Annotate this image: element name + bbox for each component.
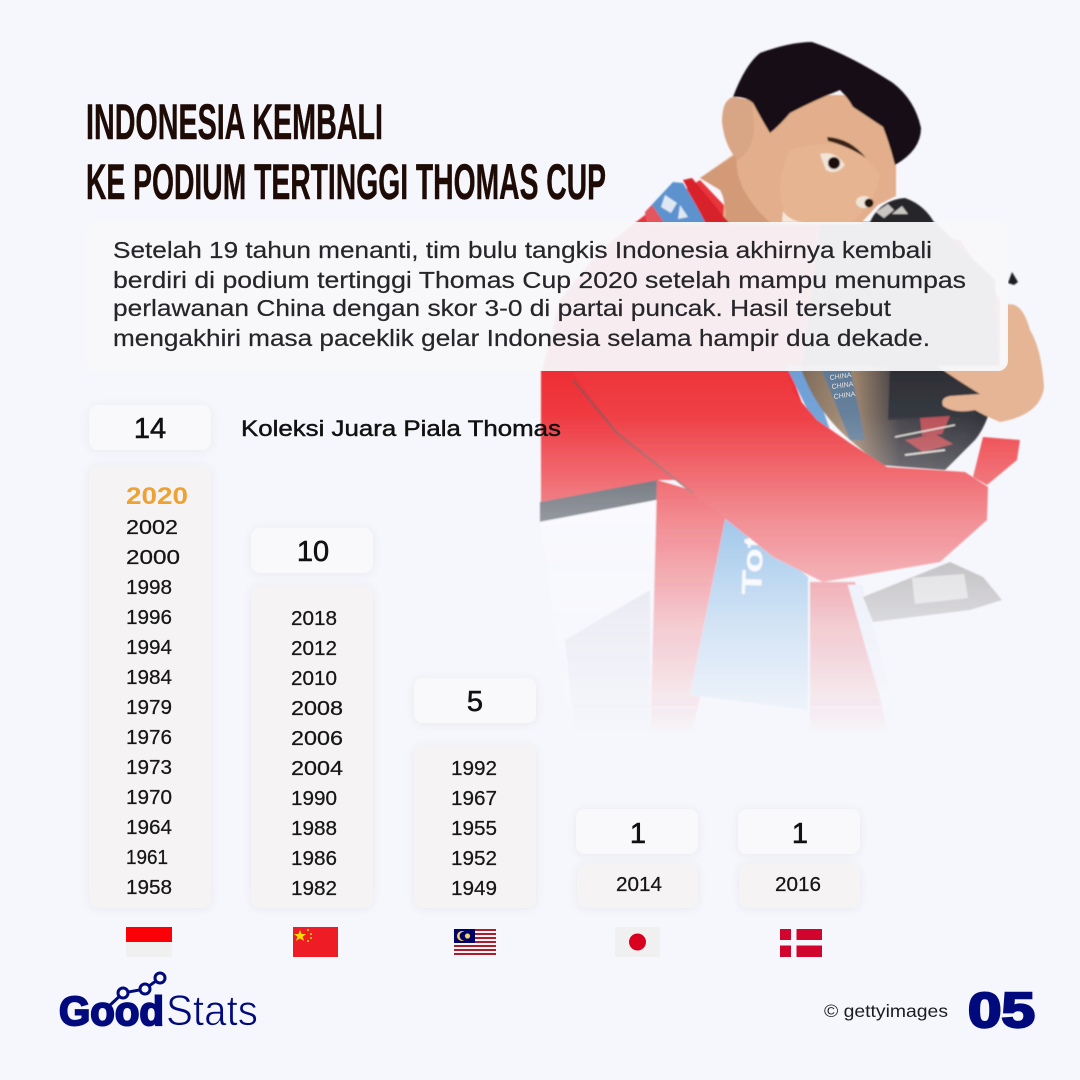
column: Indonesia: 1994: [126, 637, 172, 659]
text box: intro paragraph: perlawanan China dengan skor 3-0 di partai puncak. Hasil tersebut: [113, 295, 892, 321]
column: Malaysia: 1949: [451, 878, 497, 900]
trophy engraving: [829, 372, 856, 401]
column: China: 1982: [291, 878, 337, 900]
column: Indonesia: 14: [134, 413, 166, 445]
jacket placket: [652, 480, 726, 718]
column: Denmark: 2016: [775, 874, 821, 896]
column: Malaysia: 1967: [451, 788, 497, 810]
column: Japan: 1: [630, 818, 646, 850]
text box: intro paragraph: [86, 222, 1008, 371]
photo: badminton player hugging the Thomas Cup: [540, 42, 1044, 735]
player hair: [733, 42, 921, 165]
blue undershirt: [690, 505, 808, 710]
column: Indonesia: 1996: [126, 607, 172, 629]
jacket lower right with stripe: [809, 581, 883, 718]
text box: intro paragraph: mengakhiri masa paceklik gelar Indonesia selama hampir dua dekade.: [113, 325, 930, 351]
column: China: 10: [297, 536, 329, 568]
far sleeve: [973, 437, 1020, 485]
trophy tip: [1008, 272, 1018, 285]
column: China: 2004: [291, 758, 343, 780]
text box: intro paragraph: Setelah 19 tahun menanti, tim bulu tangkis Indonesia akhirnya kembali: [113, 237, 932, 263]
player ear: [722, 97, 754, 160]
column: Denmark: 1: [792, 818, 808, 850]
flag: Denmark: [780, 929, 822, 957]
flag: Indonesia: [126, 927, 172, 957]
column: Indonesia: 1984: [126, 667, 172, 689]
column: Indonesia: 2020: [126, 483, 188, 510]
trophy bowl: [800, 366, 1000, 470]
chart heading: Koleksi Juara Piala Thomas: [241, 416, 561, 441]
column: Malaysia: 5: [467, 686, 483, 718]
column: Indonesia: 1970: [126, 787, 172, 809]
column: Indonesia: 1976: [126, 727, 172, 749]
column: China: [251, 528, 373, 908]
column: Indonesia: 1964: [126, 817, 172, 839]
column: Japan: [576, 809, 698, 908]
title: [86, 94, 606, 210]
logo: GoodStats: [59, 973, 258, 1035]
column: Indonesia: [89, 405, 211, 908]
title: INDONESIA KEMBALI: [86, 94, 383, 150]
logo: GoodStats: Good: [59, 988, 164, 1034]
column: China: 2012: [291, 638, 337, 660]
column: Japan: 2014: [616, 874, 662, 896]
column: Malaysia: 1952: [451, 848, 497, 870]
column: Indonesia: 1958: [126, 877, 172, 899]
column: Indonesia: 1973: [126, 757, 172, 779]
text box: intro paragraph: berdiri di podium tertinggi Thomas Cup 2020 setelah mampu menumpas: [113, 267, 966, 293]
column: Malaysia: [414, 678, 536, 908]
column: China: 1990: [291, 788, 337, 810]
jacket body: [540, 371, 802, 502]
column: China: 1988: [291, 818, 337, 840]
trophy base: [863, 562, 1002, 622]
column: Indonesia: 2002: [126, 517, 178, 539]
column: China: 1986: [291, 848, 337, 870]
column: Indonesia: 1979: [126, 697, 172, 719]
trophy top: [866, 198, 935, 224]
photo credit: © gettyimages: [824, 1001, 948, 1021]
column: Denmark: [738, 809, 860, 908]
shirt grey band: [540, 480, 657, 522]
trophy engraving: CHINA: [829, 372, 852, 382]
near sleeve: [678, 402, 989, 583]
column: Malaysia: 1955: [451, 818, 497, 840]
lower body fading into the background: [540, 366, 1020, 735]
player upper body behind the text box: [541, 180, 1000, 375]
trophy engraving: CHINA: [833, 391, 856, 401]
undershirt text: Tot: [736, 534, 769, 595]
flag: Malaysia: [454, 929, 496, 955]
flag: Japan: [615, 927, 660, 957]
title: KE PODIUM TERTINGGI THOMAS CUP: [86, 154, 606, 210]
column: Indonesia: 1998: [126, 577, 172, 599]
logo: GoodStats: Stats: [166, 987, 258, 1035]
scarf strip beside trophy: [787, 371, 830, 429]
column: China: 2010: [291, 668, 337, 690]
hand on trophy right side: [937, 304, 1044, 422]
column: Indonesia: 1961: [126, 847, 168, 869]
column: Indonesia: 2000: [126, 547, 180, 569]
player neck and face: [700, 95, 896, 224]
white shirt: [540, 500, 657, 735]
column: Malaysia: 1992: [451, 758, 497, 780]
flag: China: [293, 927, 338, 957]
column: China: 2018: [291, 608, 337, 630]
player facial features: [782, 137, 874, 222]
column: China: 2006: [291, 728, 343, 750]
page number: 05: [968, 984, 1035, 1038]
scarf and collar: [645, 178, 730, 224]
column: China: 2008: [291, 698, 343, 720]
trophy engraving: CHINA: [831, 381, 854, 391]
